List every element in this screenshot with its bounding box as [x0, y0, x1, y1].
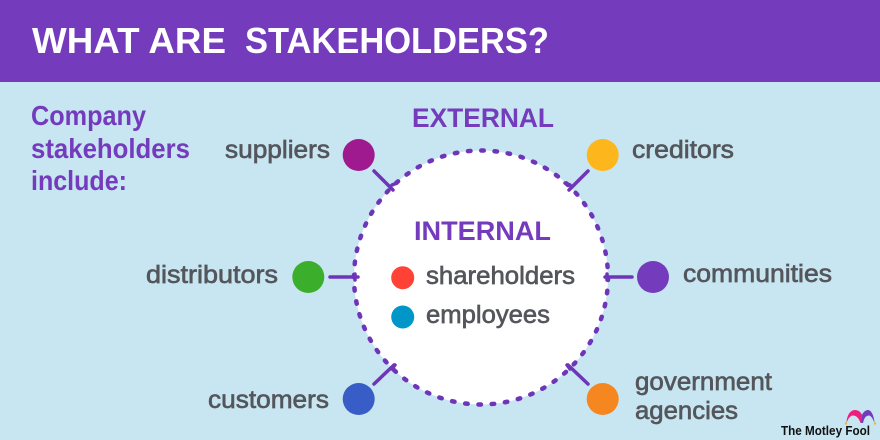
icon: jester hat [845, 410, 876, 425]
logo: The Motley Fool: The Motley Fool [781, 423, 870, 438]
node: government agencies: government [635, 368, 772, 396]
node: distributors: distributors [146, 261, 278, 289]
node: communities [637, 260, 832, 293]
logo: The Motley Fool [781, 410, 876, 438]
intro text: include: [31, 165, 127, 196]
title: WHAT ARE [32, 20, 226, 61]
item: employees: employees [426, 301, 550, 329]
heading: external: EXTERNAL [412, 103, 554, 133]
node: creditors [587, 136, 734, 171]
node: customers: customers [208, 386, 329, 414]
title: STAKEHOLDERS? [245, 20, 549, 61]
intro text [31, 100, 190, 196]
node: distributors [146, 261, 324, 293]
intro text: stakeholders [31, 133, 190, 164]
item: shareholders: shareholders [426, 262, 575, 290]
intro text: Company [31, 100, 146, 131]
title [32, 20, 549, 61]
internal circle [354, 150, 608, 404]
node: creditors: creditors [632, 136, 734, 164]
node: government agencies: agencies [635, 397, 738, 425]
node: suppliers [225, 136, 375, 171]
heading: internal: INTERNAL [414, 216, 551, 246]
node: communities: communities [683, 260, 832, 288]
header band [0, 0, 880, 82]
node: government agencies [587, 368, 772, 425]
node: customers [208, 383, 375, 415]
node: suppliers: suppliers [225, 136, 330, 164]
arrows [330, 171, 632, 384]
